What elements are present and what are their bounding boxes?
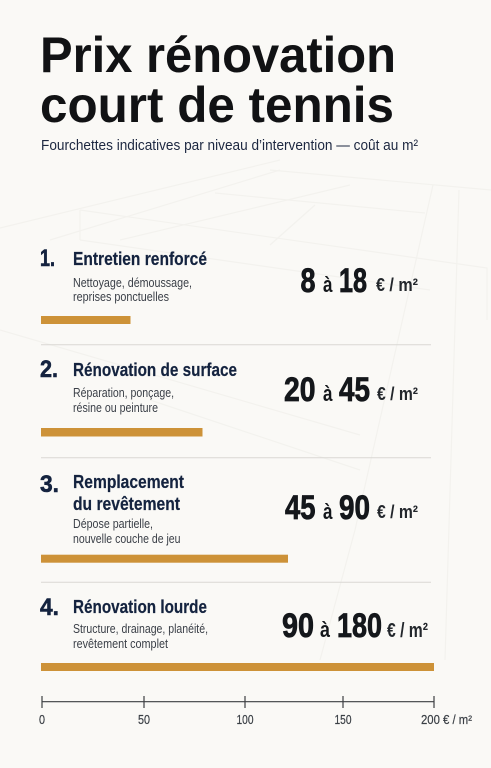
axis scale bbox=[39, 696, 473, 727]
description: résine ou peinture bbox=[73, 401, 158, 415]
axis labels: 0 bbox=[39, 712, 45, 727]
panel: item 2 rénovation de surface bbox=[40, 356, 418, 436]
price: 45 bbox=[285, 489, 316, 527]
bar bbox=[41, 663, 434, 671]
price: € / m² bbox=[387, 620, 428, 642]
description: nouvelle couche de jeu bbox=[73, 532, 181, 546]
bar bbox=[41, 555, 288, 563]
axis line and ticks bbox=[42, 696, 434, 708]
number 3: 3. bbox=[40, 471, 59, 498]
title: court de tennis bbox=[40, 77, 394, 133]
axis labels bbox=[39, 712, 473, 727]
price: € / m² bbox=[377, 502, 418, 522]
description bbox=[73, 386, 174, 415]
price: 90 bbox=[282, 607, 314, 645]
price: à bbox=[323, 381, 333, 406]
price bbox=[285, 489, 418, 527]
description: Réparation, ponçage, bbox=[73, 386, 174, 400]
description: revêtement complet bbox=[73, 637, 168, 651]
description: Nettoyage, démoussage, bbox=[73, 276, 192, 290]
subtitle: Fourchettes indicatives par niveau d’intervention — coût au m² bbox=[41, 137, 418, 154]
bar bbox=[41, 316, 130, 324]
price: € / m² bbox=[376, 275, 418, 295]
number 1: 1. bbox=[40, 245, 55, 272]
description bbox=[73, 517, 181, 546]
price: à bbox=[323, 272, 333, 297]
heading: Rénovation de surface bbox=[73, 359, 237, 380]
price bbox=[282, 607, 428, 645]
description bbox=[73, 276, 192, 304]
price: 8 bbox=[300, 262, 316, 300]
price: 90 bbox=[339, 489, 370, 527]
price: 20 bbox=[284, 371, 316, 409]
axis labels: 50 bbox=[138, 712, 150, 727]
panel: item 3 remplacement du revêtement bbox=[40, 471, 418, 563]
price: € / m² bbox=[377, 384, 418, 404]
axis labels: 100 bbox=[236, 712, 254, 727]
heading: du revêtement bbox=[73, 493, 180, 514]
number 4: 4. bbox=[40, 594, 59, 621]
axis labels: 200 € / m² bbox=[421, 712, 473, 727]
panel: item 1 entretien renforcé bbox=[40, 245, 418, 324]
price: à bbox=[323, 499, 333, 524]
title: Prix rénovation bbox=[40, 27, 396, 83]
description bbox=[73, 622, 208, 651]
panel: item 4 rénovation lourde bbox=[40, 594, 434, 671]
price: 180 bbox=[337, 607, 382, 645]
description: Dépose partielle, bbox=[73, 517, 153, 531]
description: reprises ponctuelles bbox=[73, 290, 169, 304]
bar bbox=[41, 428, 202, 436]
background: faint tennis court perspective lines bbox=[0, 160, 491, 660]
description: Structure, drainage, planéité, bbox=[73, 622, 208, 636]
price: 18 bbox=[339, 262, 367, 300]
heading: Rénovation lourde bbox=[73, 596, 207, 617]
price bbox=[300, 262, 418, 300]
axis labels: 150 bbox=[334, 712, 352, 727]
title bbox=[40, 27, 396, 133]
number 2: 2. bbox=[40, 356, 58, 383]
price: 45 bbox=[339, 371, 370, 409]
price: à bbox=[320, 617, 331, 642]
heading: Entretien renforcé bbox=[73, 248, 207, 269]
price bbox=[284, 371, 418, 409]
heading bbox=[73, 471, 184, 514]
heading: Remplacement bbox=[73, 471, 184, 492]
